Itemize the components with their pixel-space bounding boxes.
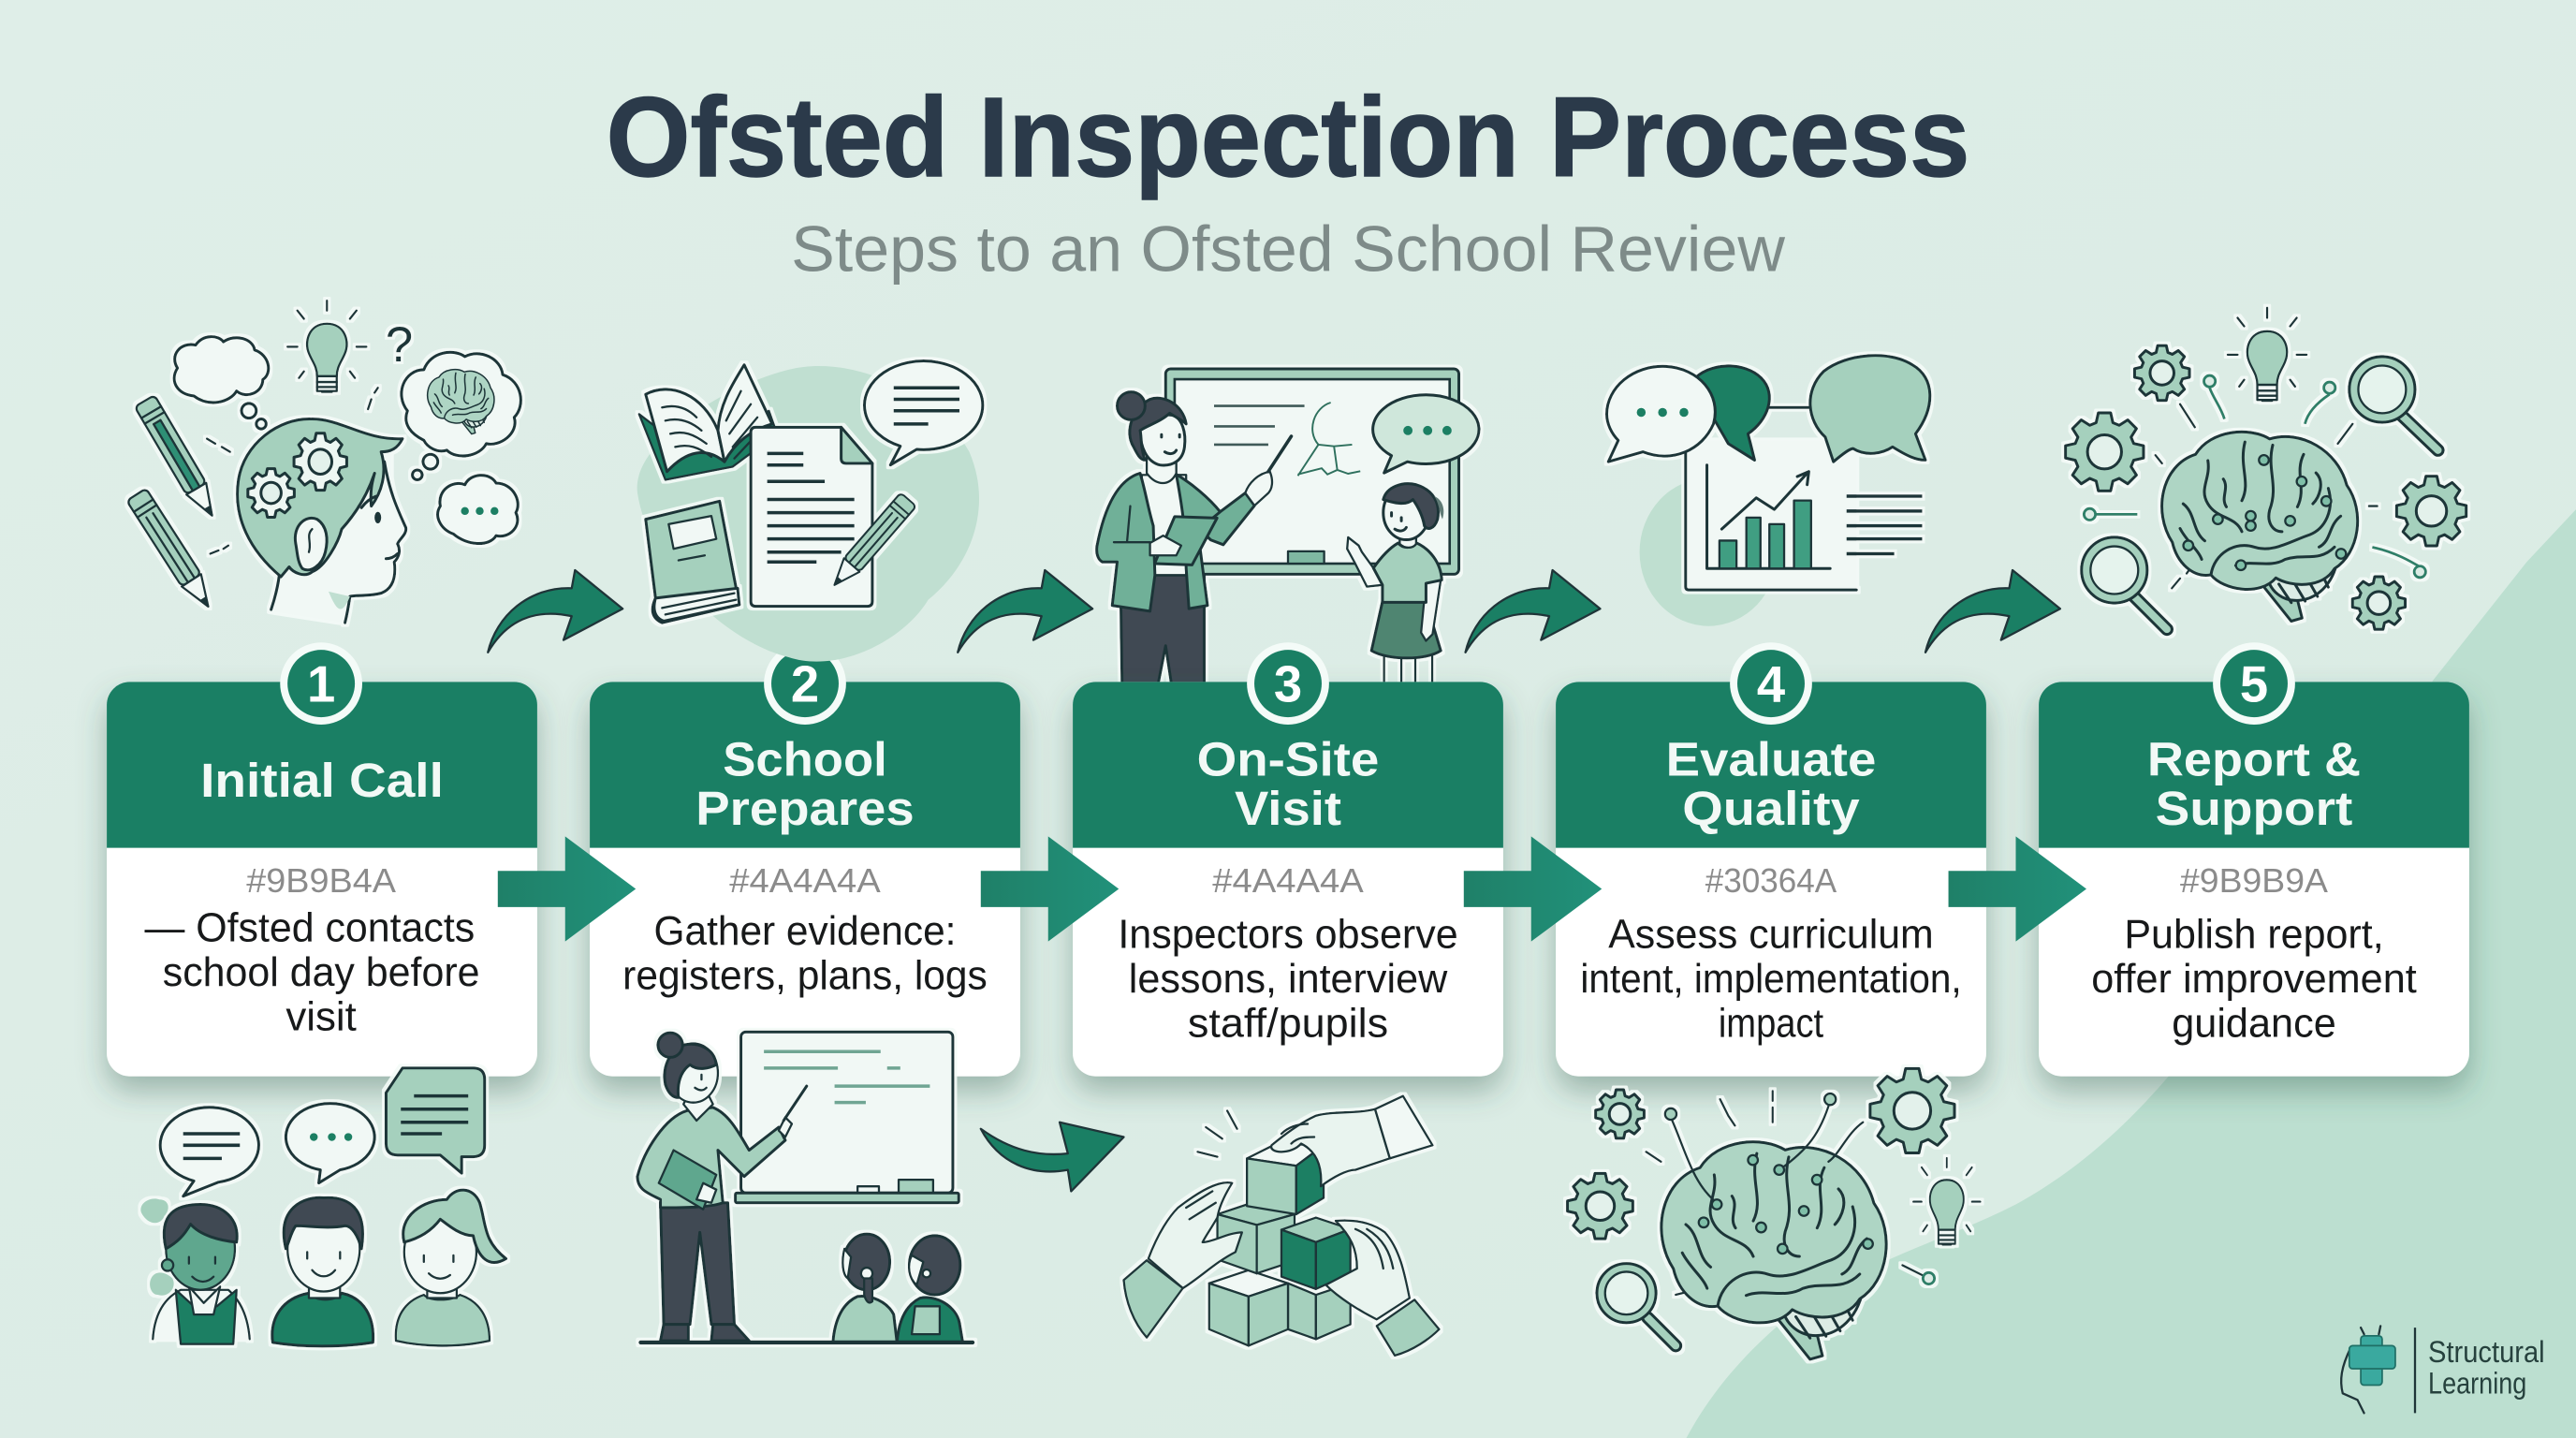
closed green book [646,501,739,623]
illustration: brain with gears and bulb [1568,1068,1981,1359]
small dashes [207,388,378,553]
card heading [695,732,915,835]
card header [1073,682,1503,848]
description [622,908,988,999]
card 5: Report & Support [2039,682,2469,1077]
card 1: Initial Call [107,682,537,1077]
illustration: chart and discussion [1606,356,1930,626]
card heading: Initial Call [200,754,444,807]
description: staff/pupils [1188,1000,1388,1046]
step number badge 2: 2 [791,655,819,712]
clipboard [1154,517,1217,565]
step number badge 4: 4 [1757,655,1785,712]
title: Ofsted Inspection Process [607,73,1969,200]
pupil 2 [272,1197,373,1346]
logo cross [2349,1336,2395,1386]
card body [590,682,1020,1077]
step number badge 5 [2213,642,2295,725]
illustration: brain and ideas [2066,308,2466,629]
description: Inspectors observe [1118,912,1458,958]
card header [590,682,1020,848]
curved arrow 5 (lower) [981,1123,1123,1191]
step number badge 3 [1247,642,1329,725]
description: school day before [163,949,479,995]
pencil [827,492,916,592]
legs [1384,651,1432,683]
question mark: ? [386,317,413,373]
impact rays [1197,1110,1237,1157]
speech bubble on board [1373,395,1479,473]
description [1580,912,1962,1046]
step number badge 1 [280,642,362,725]
colour code text: #30364A [1705,861,1837,900]
trousers [1120,575,1204,683]
shirt [1373,543,1442,602]
child head [238,418,406,623]
card heading: Quality [1682,782,1861,835]
pointer [1268,436,1292,472]
block: top [1247,1144,1324,1214]
dark speech bubble [1692,366,1769,460]
decorative puffs [140,1198,174,1296]
background corner shape [1686,509,2576,1438]
step number badge 1: 1 [307,655,335,712]
card heading [1197,732,1379,835]
pupil 1 [153,1204,250,1344]
description: intent, implementation, [1580,956,1962,1002]
arrow: card 1 to 2 [498,836,636,942]
arms [1347,537,1383,587]
brain thought cloud [402,352,520,456]
illustration: child thinking [126,301,520,623]
card heading: School [723,732,887,785]
description [144,905,479,1039]
arrow: card 4 to 5 [1949,836,2086,942]
thought circles [242,404,438,479]
lightbulb [1913,1158,1981,1244]
network connectors [2097,388,2420,567]
block: bottom left [1209,1270,1288,1345]
curved arrow 4 [1925,570,2060,653]
card body [1556,682,1986,1077]
teacher [1097,392,1292,683]
whiteboard [1165,369,1459,574]
card header [107,682,537,848]
floor line [640,1342,973,1343]
step number badge 5: 5 [2240,655,2268,712]
light speech bubble [1810,356,1930,462]
curved arrow 1 [488,570,622,653]
raised arm [1199,493,1254,545]
logo text: Structural [2428,1335,2545,1369]
block: middle right [1281,1218,1351,1289]
logo text [2428,1335,2545,1400]
description: lessons, interview [1129,956,1448,1002]
description: Assess curriculum [1608,912,1934,958]
card heading: On-Site [1197,732,1379,785]
card header [1556,682,1986,848]
card 3: On-Site Visit [1073,682,1503,1077]
hand: top right [1271,1096,1432,1186]
description: guidance [2172,1000,2336,1046]
magnifier [1597,1264,1676,1345]
pupil 3 [396,1190,506,1345]
arrow: card 2 to 3 [981,836,1119,942]
description [1118,912,1458,1046]
card body [2039,682,2469,1077]
card body [107,682,537,1077]
hands [1150,536,1181,555]
pupil B [897,1298,962,1343]
card body [1073,682,1503,1077]
description: Publish report, [2124,912,2384,958]
brain [2162,432,2358,622]
report page with chart [1686,440,1856,590]
hair [1383,484,1438,529]
document page [751,427,872,607]
colour code text: #4A4A4A [729,861,881,900]
speech bubble with dots [285,1104,374,1183]
description [2091,912,2417,1046]
pencil 2 [126,489,218,613]
magnifier top [2349,357,2438,450]
hair [1130,398,1186,460]
blob behind chart [1640,478,1778,626]
card 4: Evaluate Quality [1556,682,1986,1077]
description: impact [1719,1000,1823,1046]
colour code text: #9B9B9A [2180,861,2328,900]
text lines [1847,496,1922,553]
illustration: hands and building blocks [1123,1096,1439,1356]
colour code text: #9B9B4A [246,861,396,900]
block: bottom right [1288,1284,1351,1339]
card heading [1666,732,1876,835]
dots cloud [438,476,518,544]
speech bubble [864,361,983,465]
hand: right [1325,1221,1439,1356]
illustration: teacher and student at whiteboard, behind card 3 [1097,369,1479,683]
neck and face [1147,452,1177,483]
jacket right panel [1177,475,1221,609]
arrow: card 3 to 4 [1464,836,1602,942]
small dashes [2156,404,2378,588]
connectors [1671,1101,1928,1278]
card heading: Support [2156,782,2352,835]
face [1399,533,1416,548]
illustration: teacher at board with pupils [637,1032,973,1343]
card heading: Report & [2147,732,2361,785]
step number badge 4 [1730,642,1812,725]
description: Gather evidence: [654,908,956,954]
lightbulb [287,301,366,392]
logo rays [2361,1326,2380,1334]
logo divider [2414,1328,2416,1413]
hand: left [1123,1182,1242,1338]
logo: Structural Learning [2341,1326,2545,1413]
rectangular speech bubble [386,1068,485,1173]
block: middle left [1218,1203,1295,1273]
jacket left panel [1097,473,1155,611]
illustration: pupils talking [140,1068,506,1346]
curved arrow 2 [958,570,1092,653]
logo head outline [2341,1347,2364,1413]
connector line [1769,406,1814,408]
description: registers, plans, logs [622,953,988,999]
colour code text: #4A4A4A [1212,861,1364,900]
gears [1596,1090,1644,1138]
step number badge 3: 3 [1274,655,1302,712]
card heading: Evaluate [1666,732,1876,785]
skirt [1371,601,1441,658]
pupil pair [833,1234,962,1343]
speech bubble with lines [160,1108,258,1196]
curved arrow 3 [1466,570,1600,653]
white speech bubble [1606,366,1715,462]
pencil 1 [135,395,222,521]
card heading [2147,732,2361,835]
illustration: school documents [637,361,983,662]
open book [639,365,777,479]
board [736,1032,959,1203]
card heading: Visit [1235,782,1341,835]
step number badge 2 [764,642,846,725]
card 2: School Prepares [590,682,1020,1077]
student [1347,484,1443,683]
description: offer improvement [2091,956,2417,1002]
description: — Ofsted contacts [144,905,475,951]
logo text: Learning [2428,1366,2526,1400]
pupil A [833,1297,897,1343]
small dashes [1647,1091,1773,1295]
description: visit [285,993,357,1039]
subtitle: Steps to an Ofsted School Review [791,213,1786,286]
brain [1661,1093,1935,1359]
empty thought cloud [174,337,269,403]
lightbulb [2228,308,2306,401]
white shirt [1142,475,1186,575]
magnifier bottom [2082,537,2167,629]
green background blob [637,366,979,662]
teacher [637,1033,807,1341]
gears [2134,345,2189,401]
bun [1117,392,1145,419]
card header [2039,682,2469,848]
card heading: Prepares [695,782,915,835]
